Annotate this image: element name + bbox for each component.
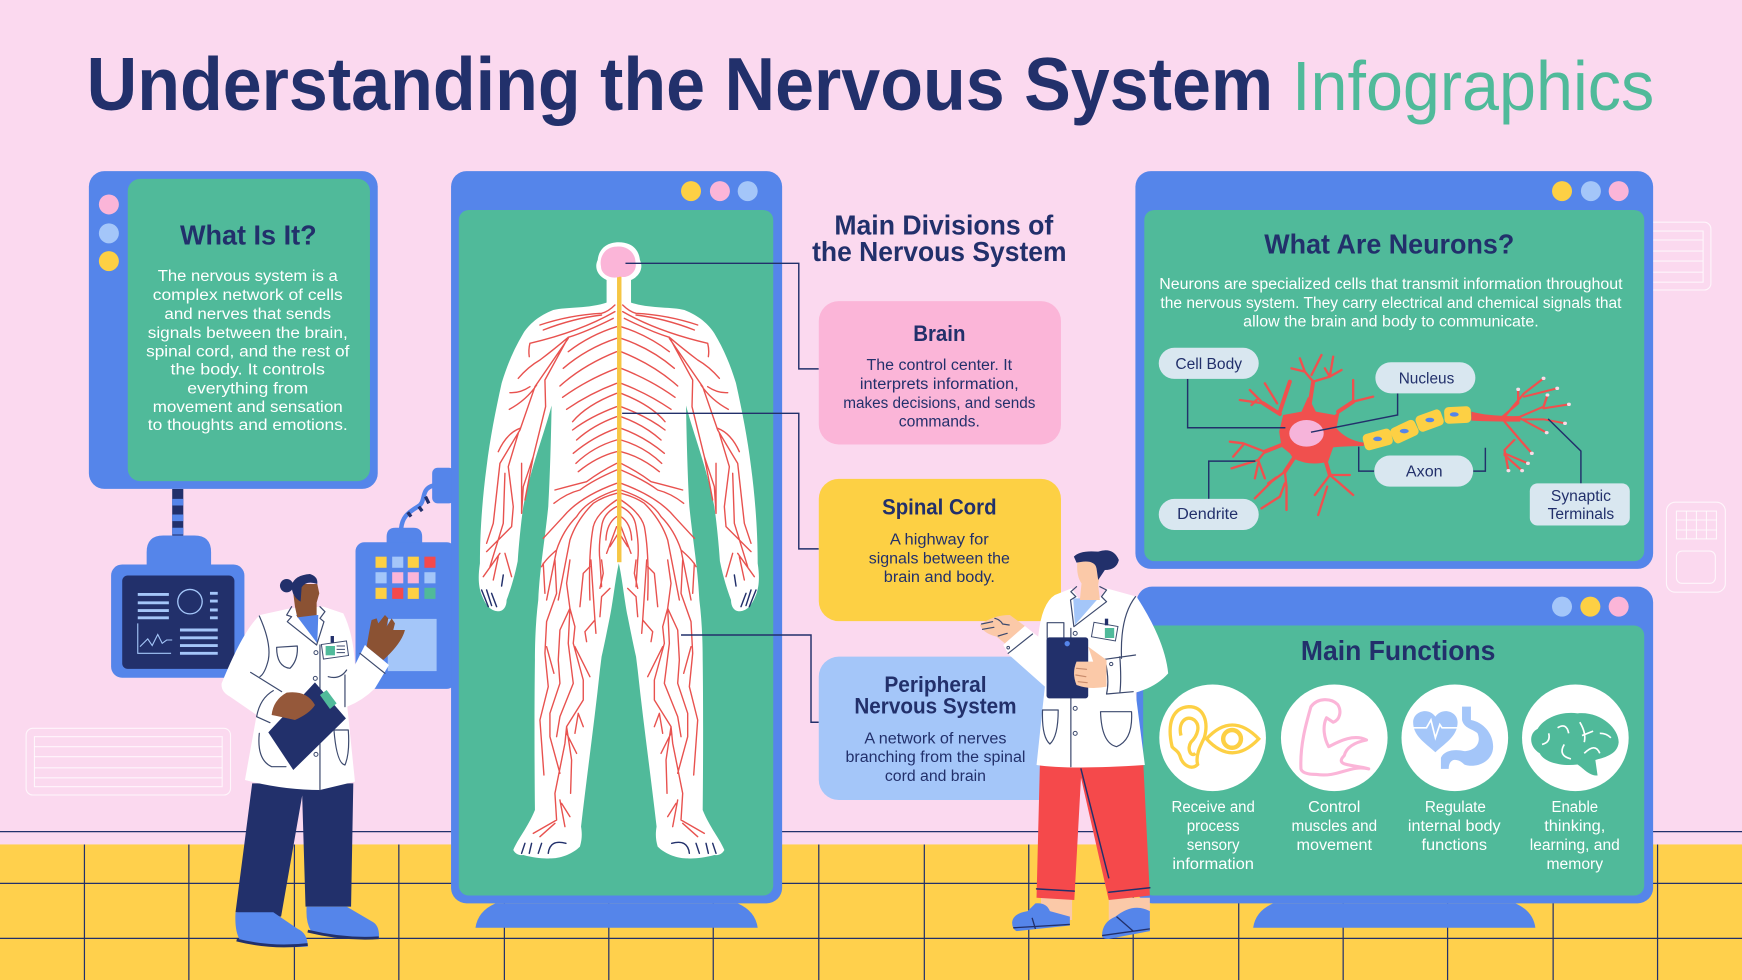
text: what is it body: the body. It controls [171, 360, 325, 378]
caption: muscles [1292, 798, 1377, 854]
text: what is it body: everything from [187, 379, 308, 397]
card: peripheral nervous system: A network of nerves [864, 729, 1007, 747]
shoes [235, 907, 379, 947]
label: dendrite: Dendrite [1177, 505, 1238, 523]
ankles [1041, 898, 1150, 922]
coat details [251, 607, 385, 790]
caption: muscles: Control [1308, 798, 1360, 816]
nerves right [619, 305, 754, 837]
character: doctor right [980, 550, 1168, 939]
head silhouette [596, 242, 641, 307]
axon terminals [1471, 377, 1571, 472]
nerves left [483, 305, 618, 837]
text: what is it body: The nervous system is a [158, 267, 338, 285]
shirt [296, 615, 318, 643]
text: neurons body: allow the brain and body to communicate. [1243, 313, 1539, 331]
badge [321, 636, 349, 659]
text: what is it body: signals between the brain, [148, 324, 348, 342]
card: brain: Brain [913, 321, 965, 346]
caption: sensory [1172, 798, 1255, 873]
card: brain: The control center. It [867, 356, 1013, 374]
badge [1091, 619, 1118, 641]
text: what is it body: spinal cord, and the rest of [146, 343, 350, 361]
label: cell body: Cell Body [1175, 355, 1243, 373]
holding hand [1074, 647, 1107, 688]
text: neurons body: the nervous system. They carry electrical and chemical signals that [1160, 294, 1622, 312]
heading: main functions: Main Functions [1301, 635, 1495, 666]
panel: what is it [89, 171, 378, 489]
monitor device [111, 536, 244, 678]
control panel device [356, 468, 455, 689]
shirt [1073, 598, 1098, 625]
neuron diagram [1230, 355, 1571, 515]
upper body [980, 550, 1168, 768]
heading: neurons: What Are Neurons? [1264, 228, 1514, 259]
caption: thinking [1530, 798, 1620, 873]
caption: thinking: Enable [1551, 798, 1598, 816]
label: cell body [1159, 348, 1259, 379]
text: what is it body: and nerves that sends [164, 305, 331, 323]
human body nervous system figure [479, 242, 759, 858]
decorative floor [0, 832, 1742, 980]
icon: heart and stomach [1401, 684, 1508, 791]
card: spinal cord [819, 479, 1061, 621]
card: spinal cord: Spinal Cord [882, 494, 997, 519]
text: neurons body [1159, 275, 1623, 331]
text: neurons body: Neurons are specialized cells that transmit information throughout [1159, 275, 1623, 293]
icon: muscle [1281, 684, 1388, 791]
label: synaptic terminals: Synaptic [1551, 487, 1611, 505]
card: peripheral nervous system: cord and brain [885, 767, 986, 785]
card: peripheral nervous system: branching from the spinal [845, 748, 1025, 766]
body panel stand [475, 903, 758, 928]
spinal cord [617, 276, 621, 562]
text: what is it body: movement and sensation [153, 398, 343, 416]
text: what is it body: complex network of cells [153, 286, 343, 304]
label: synaptic terminals: Terminals [1548, 505, 1614, 523]
cell body and dendrites [1230, 355, 1373, 515]
caption: sensory: process [1187, 817, 1240, 835]
caption: regulate: functions [1421, 836, 1487, 854]
upper body [222, 574, 405, 790]
tablet [1047, 637, 1088, 698]
heading: main divisions: the Nervous System [812, 236, 1067, 267]
myelin sheath [1362, 406, 1471, 451]
trousers [1037, 761, 1150, 900]
card: brain: interprets information, [860, 375, 1019, 393]
caption: muscles: muscles and [1292, 817, 1377, 835]
head [1074, 550, 1119, 600]
label: synaptic terminals [1530, 483, 1630, 526]
card: brain: commands. [899, 413, 980, 431]
text: what is it body: to thoughts and emotions. [148, 416, 348, 434]
caption: muscles: movement [1297, 836, 1373, 854]
neuron leader lines [1188, 379, 1581, 499]
label: axon [1374, 456, 1473, 487]
icon: ear and eye [1159, 684, 1266, 791]
label: axon: Axon [1406, 463, 1443, 481]
slippers [1012, 903, 1150, 939]
card: peripheral nervous system: Nervous System [854, 693, 1017, 718]
caption: thinking: learning, and [1530, 836, 1620, 854]
leader lines [622, 263, 819, 722]
character: doctor left [222, 574, 405, 947]
card: peripheral nervous system [819, 657, 1061, 800]
wall outline decorations [26, 222, 1725, 795]
icon: brain [1522, 684, 1629, 791]
caption: thinking: thinking, [1544, 817, 1605, 835]
coat details [1008, 587, 1136, 767]
card: spinal cord: signals between the [869, 549, 1010, 567]
head [280, 574, 319, 617]
caption: regulate: Regulate [1425, 798, 1486, 816]
label: nucleus [1375, 362, 1475, 393]
monitor cable [172, 489, 183, 538]
title: Infographics [1292, 47, 1654, 125]
panel: what are neurons [1135, 171, 1653, 569]
lab coat [1003, 588, 1168, 768]
heading: main divisions: Main Divisions of [834, 209, 1054, 240]
card: peripheral nervous system: Peripheral [884, 672, 987, 697]
functions panel stand [1253, 903, 1535, 928]
label: dendrite [1159, 499, 1259, 530]
clipboard [268, 682, 346, 770]
caption: regulate: internal body [1408, 817, 1502, 835]
trousers [236, 783, 353, 917]
raised hand [367, 615, 405, 660]
heading: main divisions [812, 209, 1067, 267]
heading: what is it: What Is It? [180, 219, 317, 250]
hand [980, 615, 1025, 643]
toes and fingers [482, 575, 756, 853]
body silhouette left [479, 302, 620, 858]
panel: main functions [1137, 587, 1653, 903]
card: spinal cord: A highway for [890, 530, 989, 548]
card: brain: makes decisions, and sends [843, 394, 1035, 412]
lab coat [222, 607, 389, 790]
label: nucleus: Nucleus [1399, 369, 1454, 387]
panel: body display [451, 171, 782, 903]
caption: regulate [1408, 798, 1502, 854]
body silhouette right [618, 302, 759, 858]
card: brain [819, 301, 1061, 444]
holding hand [272, 692, 315, 720]
text: what is it body [146, 267, 350, 434]
caption: sensory: sensory [1187, 836, 1240, 854]
card: spinal cord: brain and body. [884, 568, 995, 586]
caption: sensory: information [1172, 855, 1254, 873]
brain [601, 247, 636, 278]
caption: sensory: Receive and [1172, 798, 1255, 816]
caption: thinking: memory [1546, 855, 1604, 873]
title: Understanding the Nervous System [87, 43, 1273, 127]
